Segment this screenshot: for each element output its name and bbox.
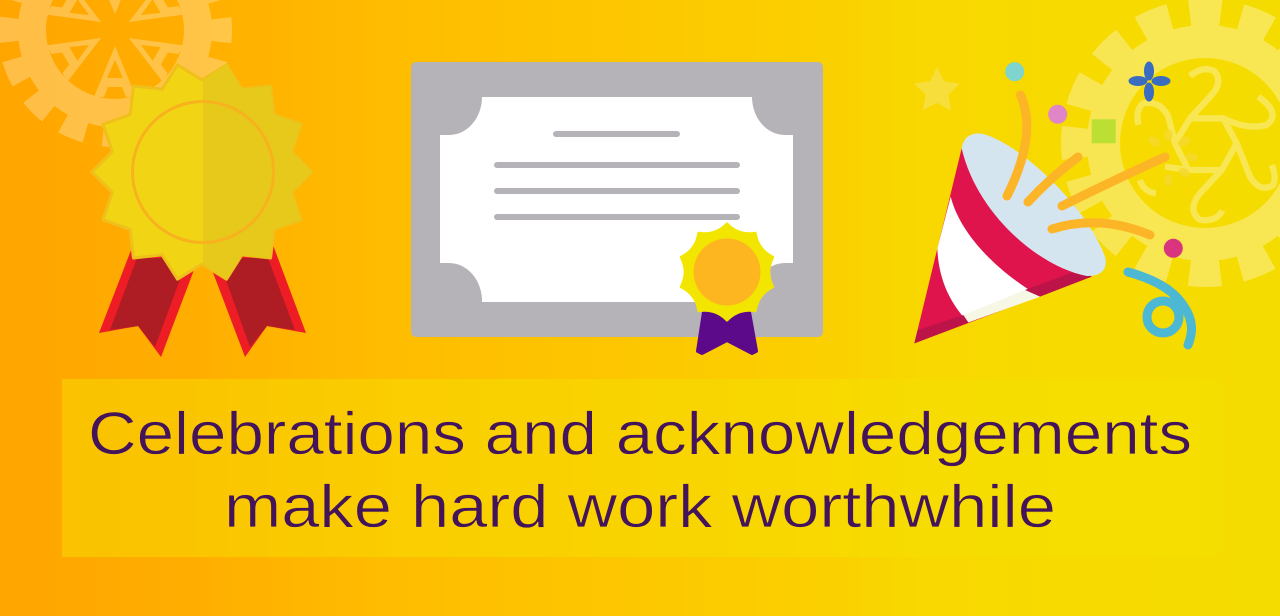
right ribbon <box>209 245 306 357</box>
certificate frame <box>411 62 823 337</box>
seal <box>681 224 773 320</box>
icon: medal <box>92 65 312 357</box>
certificate paper <box>440 97 793 302</box>
popper cone <box>914 148 1092 343</box>
medal badge <box>92 65 312 279</box>
title: make hard work worthwhile <box>224 473 1056 540</box>
icon: blue curl <box>1128 272 1192 345</box>
confetti <box>1005 62 1192 345</box>
popper white stripe <box>937 197 1040 322</box>
title: Celebrations and acknowledgements <box>88 400 1192 467</box>
popper mouth <box>962 133 1106 276</box>
icon: gear top left <box>9 0 221 136</box>
icon: faint star <box>914 67 960 110</box>
icon: gear centre petals <box>1146 129 1198 186</box>
icon: blue flower <box>1128 62 1170 102</box>
title <box>88 400 1192 540</box>
icon: party popper <box>914 133 1106 343</box>
seal ribbon <box>698 312 756 353</box>
popper shading <box>914 273 1092 343</box>
icon: certificate <box>411 62 823 353</box>
streamers <box>1007 95 1165 235</box>
left ribbon <box>99 245 197 357</box>
icon: gear top right <box>1075 13 1280 273</box>
certificate text lines <box>494 131 740 220</box>
title panel <box>62 379 1222 557</box>
